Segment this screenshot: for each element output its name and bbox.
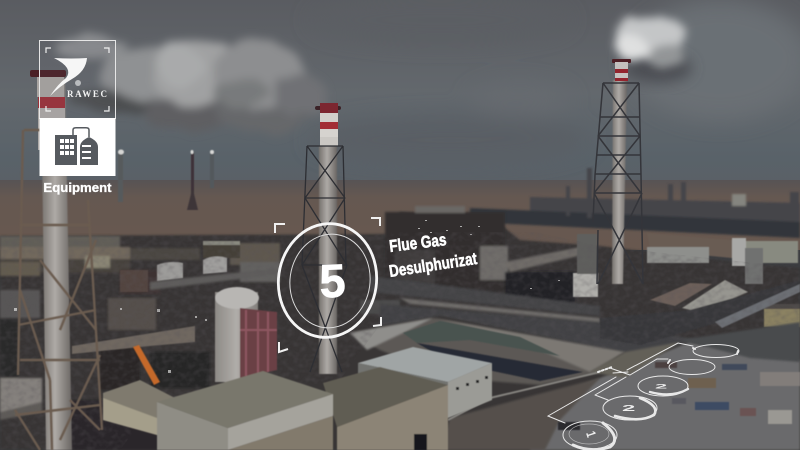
number: 5 — [318, 254, 346, 307]
yard railing — [448, 372, 600, 420]
marker 1: 1 — [583, 430, 598, 440]
route lines and circles — [548, 343, 739, 450]
basin surrounds — [350, 318, 620, 385]
outline box — [40, 40, 116, 118]
callout label — [388, 231, 478, 281]
warehouses foreground — [103, 287, 492, 450]
smoke plume: right — [617, 14, 692, 83]
smoke plume: left — [56, 34, 328, 132]
upper-left plant detail — [0, 236, 280, 450]
corner brackets — [275, 218, 381, 352]
lower-right concrete yard — [530, 342, 800, 450]
callout label: Desulphurizat — [388, 250, 478, 281]
speckled plant lights — [14, 220, 560, 373]
logo wordmark: RAWEC — [67, 89, 107, 99]
logo panel — [40, 40, 116, 118]
callout label: Flue Gas — [388, 231, 447, 256]
tanks and small building — [120, 241, 240, 292]
desert ground — [0, 180, 800, 250]
yard vehicles — [558, 362, 800, 430]
slope left of yard — [590, 342, 680, 378]
marker 3: 2 — [655, 383, 667, 390]
category panel: equipment — [40, 118, 116, 176]
route lines — [548, 343, 693, 423]
inner ring — [284, 229, 376, 333]
steel lattice — [15, 130, 102, 450]
logo mark — [50, 58, 87, 96]
central dense process plant — [360, 206, 700, 356]
sky tonal clouds — [310, 0, 800, 164]
right side sand and buildings — [573, 233, 800, 345]
dashes — [598, 367, 612, 372]
step callout: circle number 5 — [271, 217, 384, 352]
marker 2: 2 — [622, 404, 635, 413]
water basin — [403, 321, 560, 356]
marker 2 — [603, 396, 657, 420]
crane — [133, 345, 160, 385]
right chimney — [593, 59, 643, 284]
elevated walkway — [72, 326, 195, 354]
category label: Equipment — [43, 180, 112, 195]
warehouse 2 — [323, 367, 448, 450]
warehouse 1 — [157, 371, 333, 450]
centre chimney — [302, 103, 347, 374]
marker 1 — [563, 421, 617, 450]
FGD tower — [215, 287, 277, 382]
distant small flare stacks — [118, 150, 214, 210]
inner corner marks — [46, 48, 109, 111]
marker 3 — [638, 376, 688, 396]
low building — [103, 380, 175, 435]
far refinery silhouette — [470, 168, 800, 238]
marker 4 — [668, 360, 715, 374]
white building — [358, 347, 492, 418]
sky — [0, 0, 800, 186]
icon: plant building and tank — [55, 128, 98, 165]
marker 5 — [693, 344, 739, 358]
grain texture — [0, 232, 800, 450]
outer ring — [271, 217, 384, 344]
left chimney — [15, 70, 102, 450]
plant ground — [0, 212, 800, 450]
